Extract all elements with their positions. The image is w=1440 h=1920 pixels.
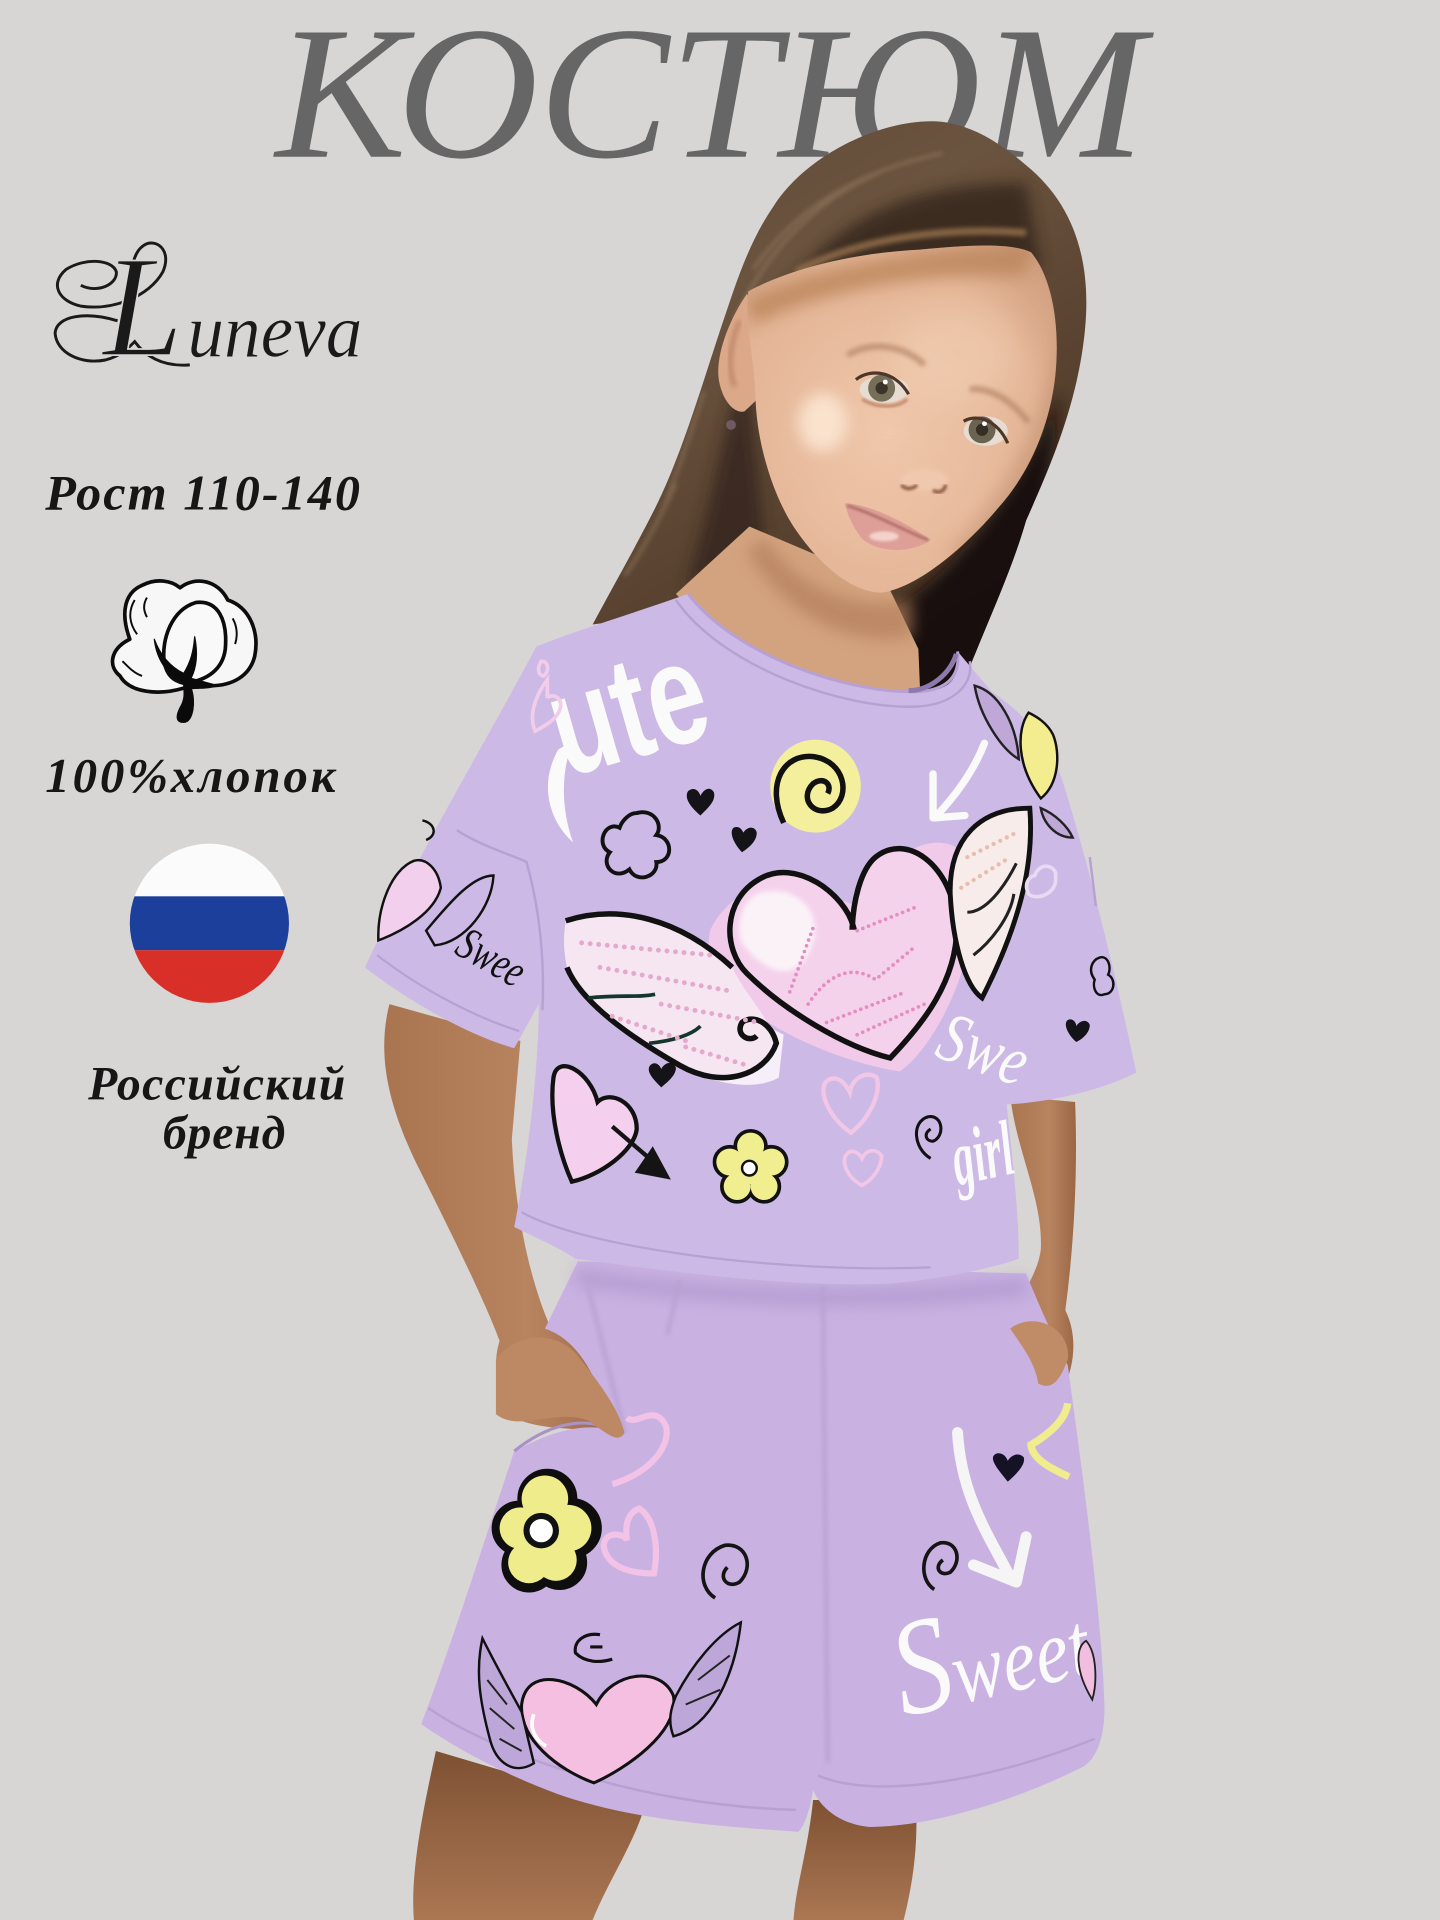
shorts print: winged heart [479, 1622, 741, 1783]
shirt print: outline flower [603, 812, 669, 877]
brand logo: Luneva: uneva [187, 289, 362, 373]
eyes and brows [847, 347, 1029, 446]
shirt print: yellow flower [716, 1133, 785, 1200]
left arm [384, 1004, 624, 1435]
brand logo: Luneva [55, 227, 362, 387]
shirt print: yellow spiral [770, 740, 861, 833]
shorts print: small spiral [924, 1543, 957, 1589]
shorts print: yellow flower [497, 1474, 596, 1587]
right sleeve print [1091, 957, 1113, 995]
right leg [793, 1800, 916, 1920]
right arm [1009, 1096, 1076, 1390]
shirt print: sweet girl lettering [928, 997, 1039, 1202]
shirt print: top right winged yellow heart [975, 686, 1073, 897]
shorts print: sweet lettering: Sweet [876, 1553, 1103, 1746]
shorts print: black heart [993, 1453, 1024, 1482]
shorts print: pink heart [1078, 1641, 1095, 1700]
mouth [845, 503, 931, 550]
shorts print: yellow heart [1031, 1403, 1069, 1477]
left sleeve print [378, 820, 535, 998]
ear and earring [718, 294, 765, 430]
icon: cotton boll [113, 581, 256, 722]
neck [676, 527, 921, 709]
shirt print: white arrow [933, 743, 984, 818]
infographic canvas [45, 31, 1154, 1920]
shorts [421, 1261, 1104, 1832]
shirt print: sweet girl lettering: girl [942, 1104, 1021, 1202]
hands [496, 1337, 624, 1438]
shirt print: cute lettering: ute [530, 608, 725, 807]
icon: Russian flag circle [130, 844, 289, 1003]
left sleeve print: Swee [448, 918, 535, 998]
shirt print: heart with arrow [552, 1066, 669, 1182]
shirt print: winged sequin heart [564, 808, 1031, 1085]
shirt print: outlined hearts and spiral [823, 1075, 941, 1185]
shorts print: outlined pink hearts [604, 1415, 667, 1573]
left leg [413, 1751, 643, 1920]
shirt print: black hearts [649, 789, 1090, 1087]
shirt print: cute lettering [530, 608, 725, 842]
material label: 100%хлопок [45, 748, 337, 803]
shorts print: white arrow [958, 1433, 1026, 1582]
brand origin label: бренд [163, 1107, 285, 1160]
shorts print: spiral [703, 1545, 747, 1598]
face [747, 245, 1078, 593]
hair [593, 121, 1086, 698]
brand origin label: Российский [87, 1058, 345, 1111]
nose [900, 469, 949, 492]
girl figure [365, 121, 1136, 1920]
height range label: Рост 110-140 [44, 464, 360, 520]
brand logo: Luneva: L [101, 227, 183, 387]
brand origin label [87, 1058, 345, 1160]
t-shirt [365, 594, 1136, 1284]
shirt print: sweet girl lettering: Swe [928, 997, 1039, 1102]
shirt print: small pink hearts [532, 661, 561, 731]
